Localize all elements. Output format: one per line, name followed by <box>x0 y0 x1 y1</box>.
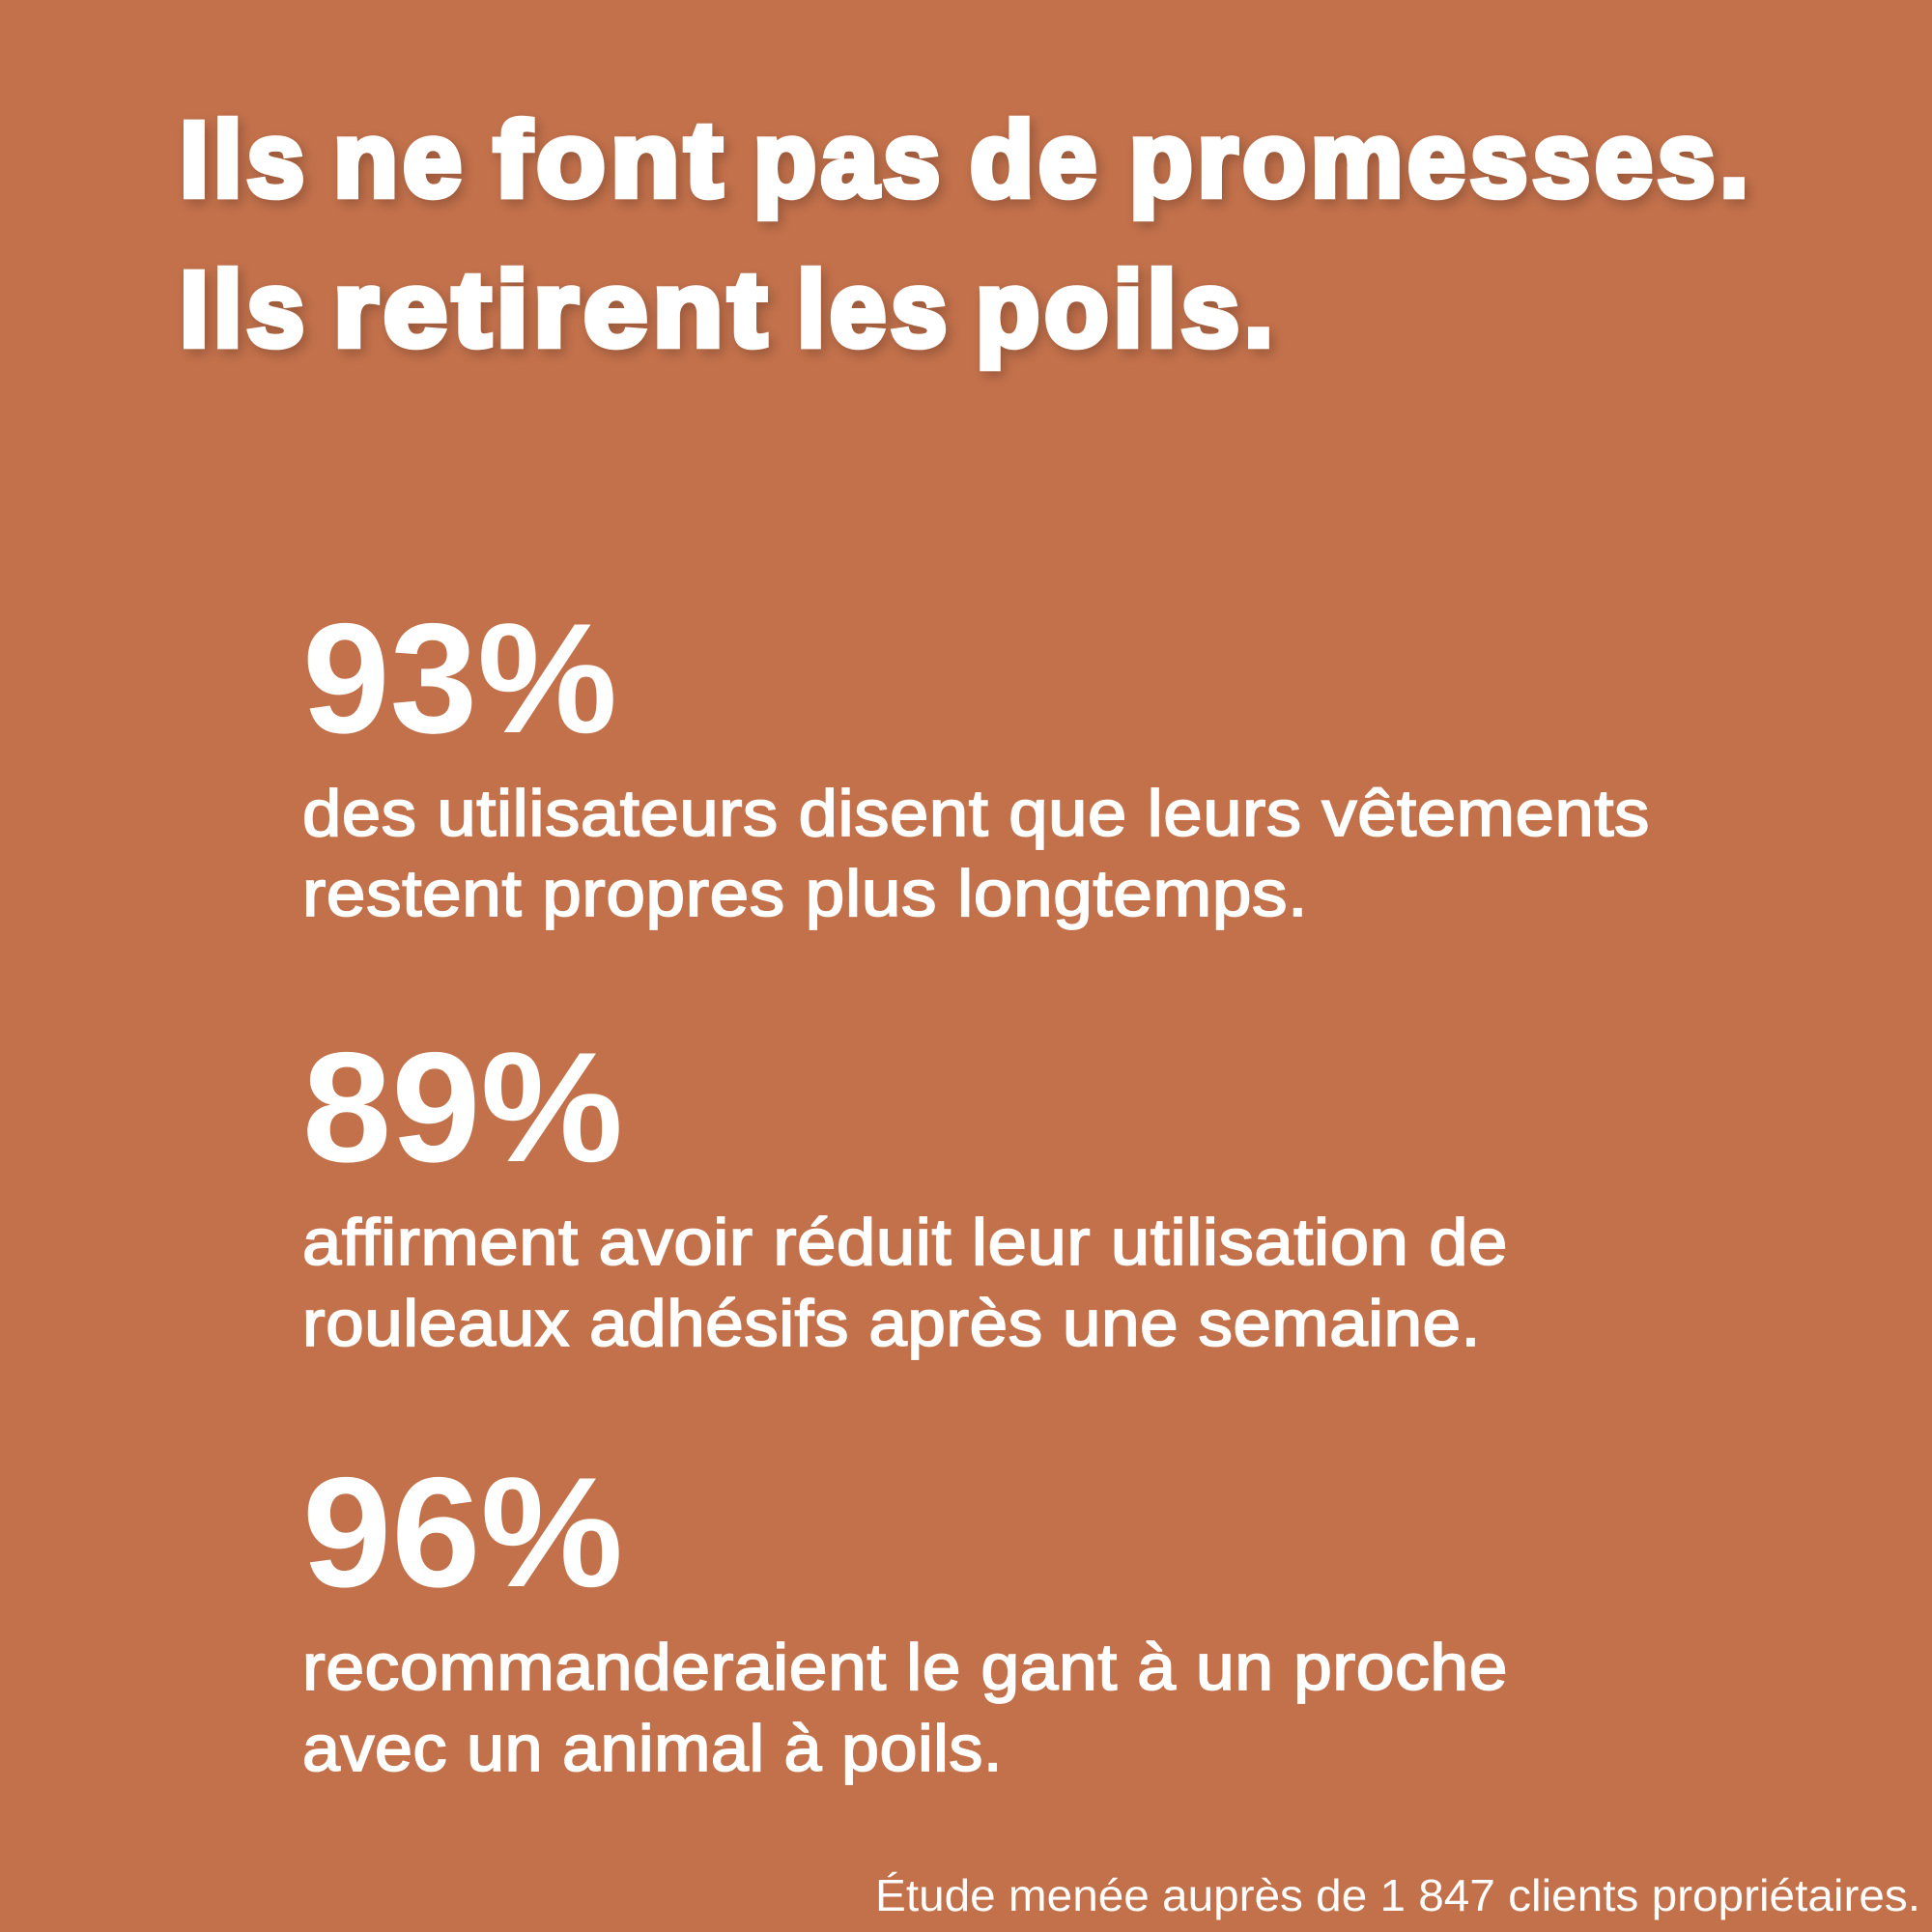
stat block: 96% <box>302 1445 1508 1785</box>
footnote: Étude menée auprès de 1 847 clients propriétaires. <box>875 1870 1920 1920</box>
title line 2: les <box>797 250 952 369</box>
stat number 96%: 96% <box>302 1445 623 1620</box>
stat description 89%: rouleaux adhésifs après une semaine. <box>302 1287 1481 1360</box>
title line 1: pas <box>753 100 945 219</box>
stat description 89%: affirment avoir réduit leur utilisation de <box>302 1206 1508 1279</box>
title line 1: font <box>494 100 727 219</box>
stat description 96%: recommanderaient le gant à un proche <box>302 1631 1508 1704</box>
stat description 93%: des utilisateurs disent que leurs vêtements <box>302 777 1650 850</box>
title line 1: de <box>970 100 1101 219</box>
stat description 93%: restent propres plus longtemps. <box>302 857 1308 930</box>
title line 2 <box>180 250 1278 369</box>
stat description 96% <box>302 1631 1508 1785</box>
stat description 93% <box>302 777 1650 930</box>
title line 1: ne <box>333 100 467 219</box>
stat number 89%: 89% <box>302 1020 623 1195</box>
title line 1 <box>180 100 1753 219</box>
title line 2: Ils <box>180 250 309 369</box>
title line 1: Ils <box>180 100 309 219</box>
stat description 96%: avec un animal à poils. <box>302 1712 1003 1785</box>
stat block: 93% <box>302 591 1650 930</box>
title line 1: promesses. <box>1129 100 1753 219</box>
stat block: 89% <box>302 1020 1508 1360</box>
stat number 93%: 93% <box>302 591 617 766</box>
stat description 89% <box>302 1206 1508 1360</box>
title line 2: retirent <box>333 250 772 369</box>
title line 2: poils. <box>976 250 1278 369</box>
title <box>180 100 1753 369</box>
